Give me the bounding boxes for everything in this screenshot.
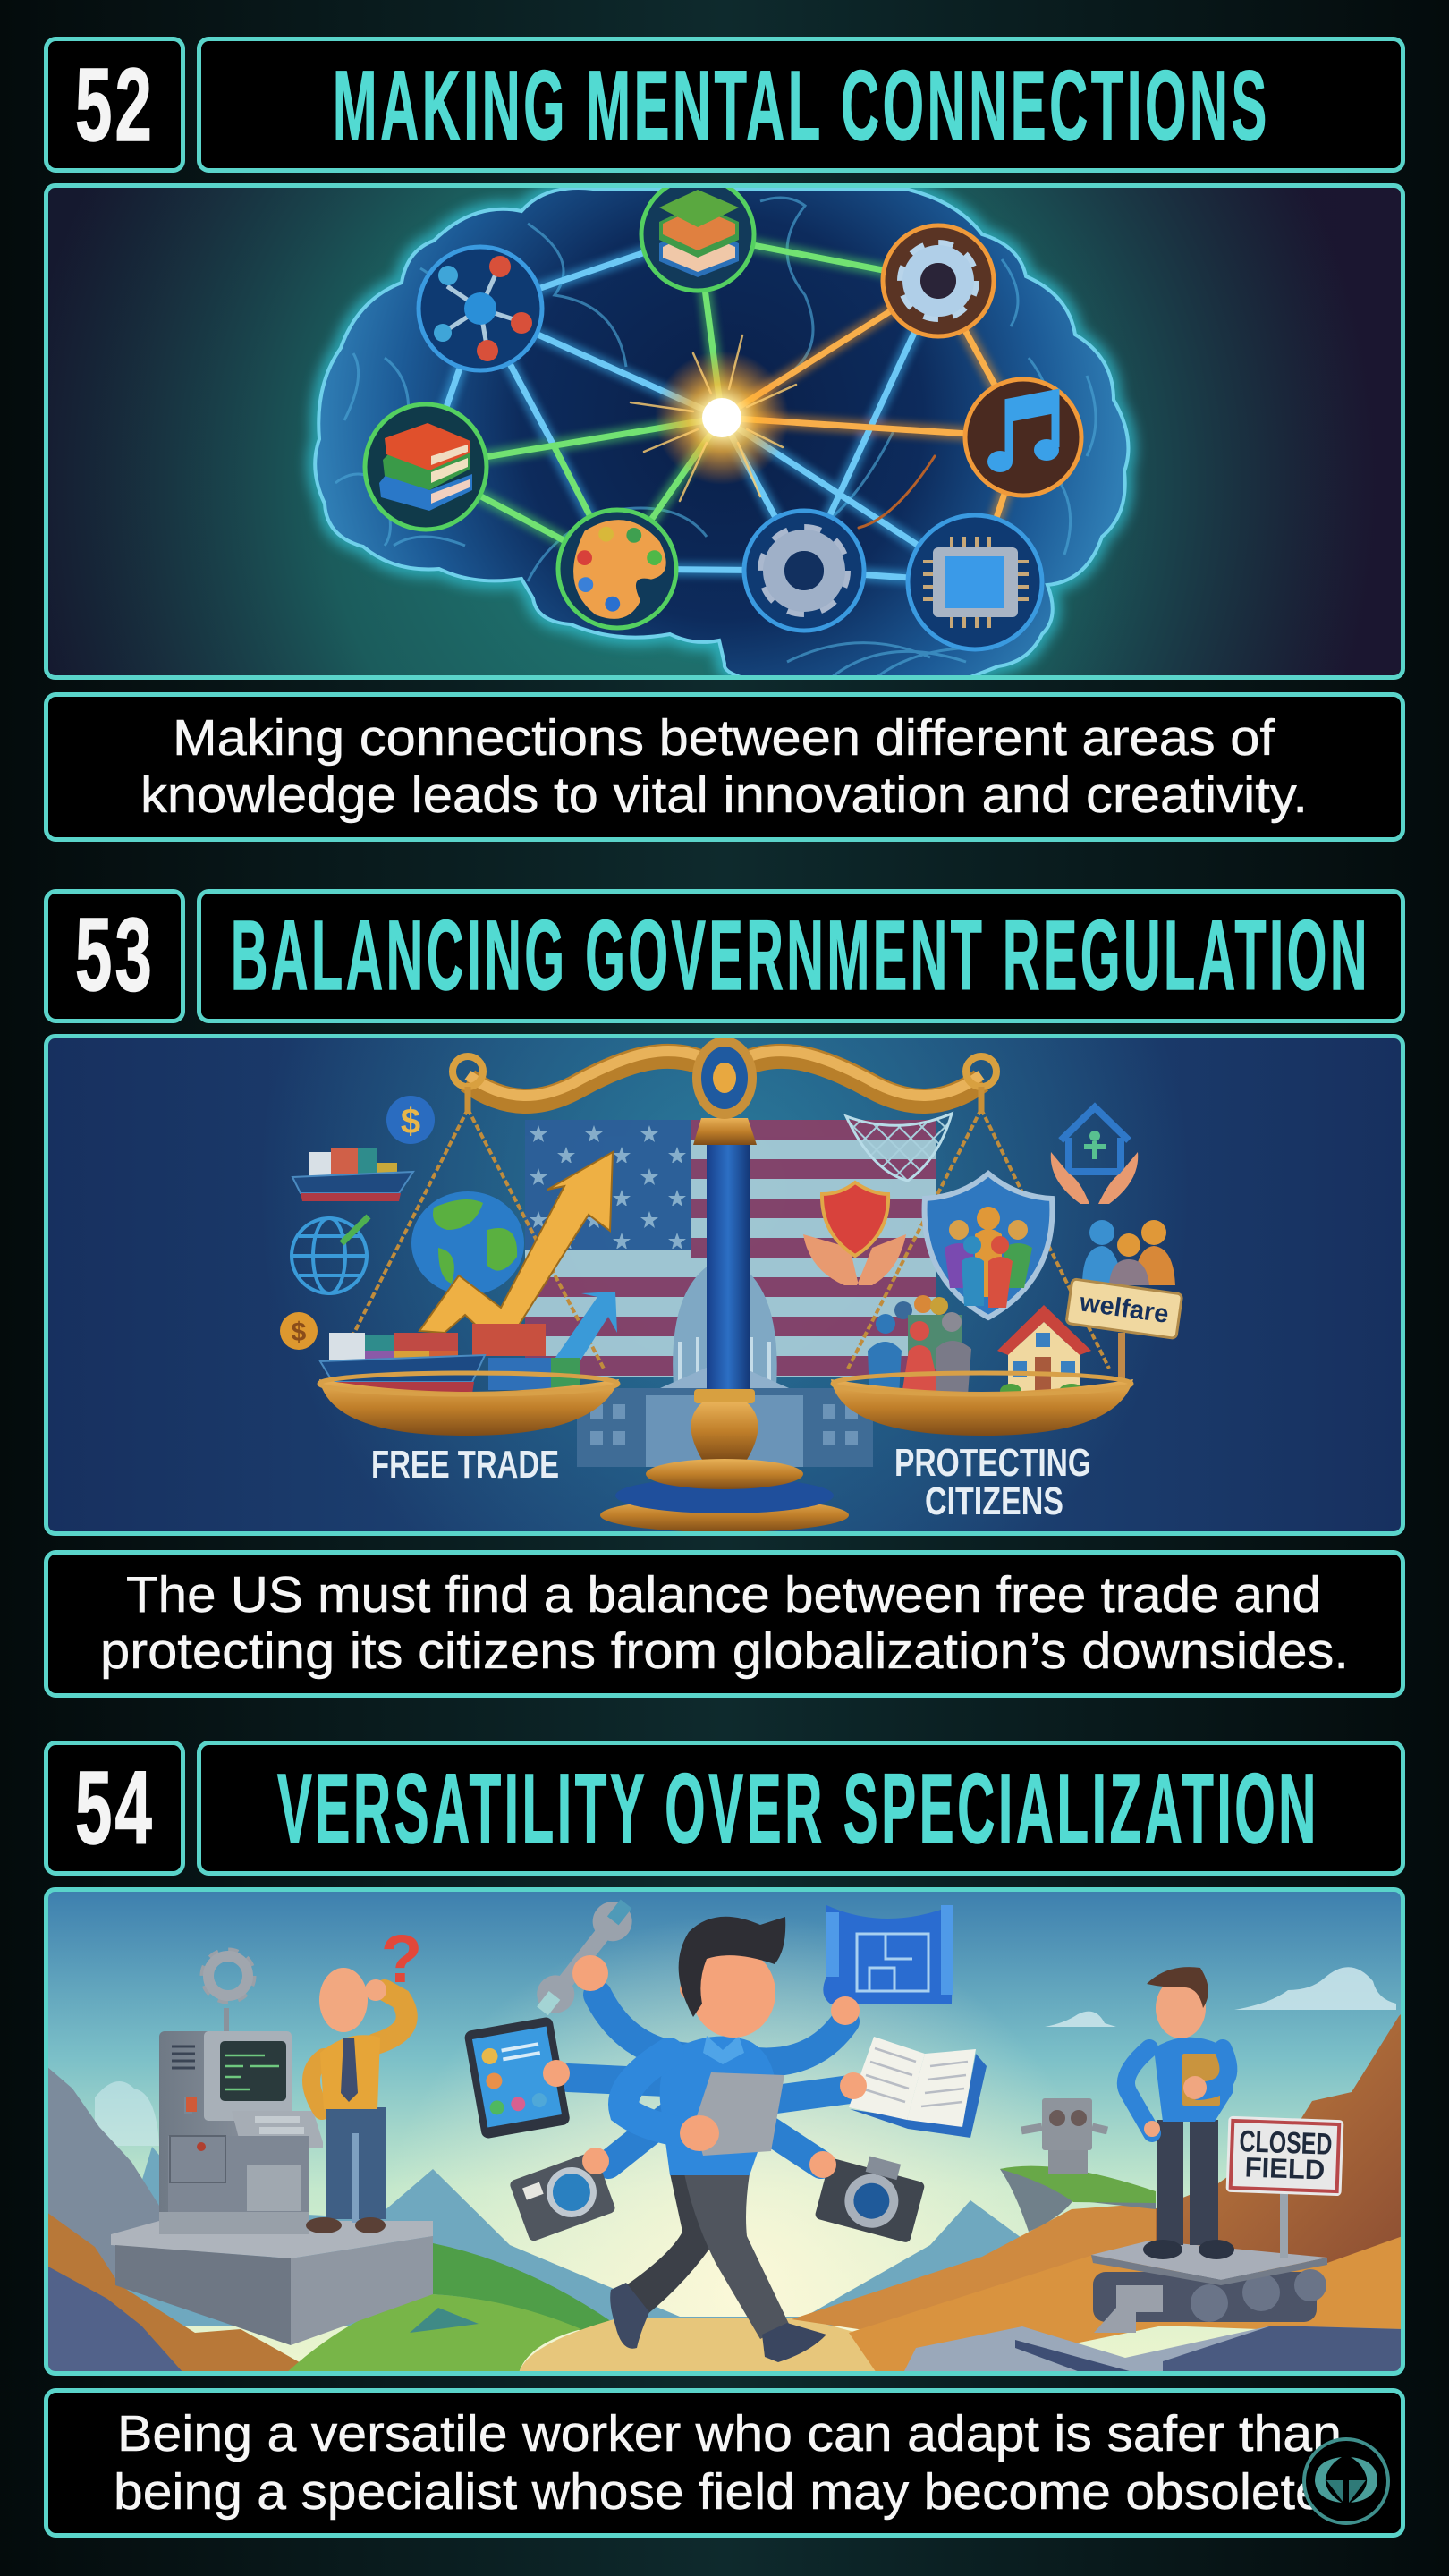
- brain silhouette: [315, 188, 1128, 677]
- node: green book stack: [641, 178, 754, 291]
- caption 53: The US must find a balance between free trade and: [126, 1566, 1321, 1623]
- safety net: [846, 1114, 952, 1181]
- american flag: [525, 1120, 936, 1377]
- gold rising arrow: [419, 1152, 613, 1351]
- closed field sign: CLOSED: [1239, 2124, 1333, 2162]
- label: protecting citizens: [894, 1441, 1091, 1523]
- node: music note: [965, 379, 1081, 496]
- spark at centre of brain: [631, 335, 796, 501]
- back leg: [626, 2174, 720, 2315]
- citizens group: [1082, 1220, 1175, 1285]
- head and hair: [679, 1917, 785, 2038]
- number badge 52: [47, 39, 182, 170]
- label: free trade: FREE TRADE: [371, 1443, 559, 1487]
- node: blue gear: [744, 511, 864, 631]
- large shield with citizens: [925, 1174, 1052, 1318]
- tablet in hand: [463, 2016, 571, 2140]
- caption 52: [47, 694, 1402, 839]
- left chains: [353, 1109, 604, 1368]
- orange hills: [792, 2203, 1402, 2373]
- node: orange gear: [883, 225, 994, 336]
- stone pedestal: [111, 2221, 433, 2345]
- man with folder: [1126, 1967, 1234, 2259]
- network links: [426, 234, 1023, 582]
- earth globe: [411, 1191, 524, 1295]
- right brown cliff: [1154, 2012, 1402, 2272]
- caption 52: knowledge leads to vital innovation and creativity.: [140, 767, 1308, 824]
- caption 53: protecting its citizens from globalization’s downsides.: [100, 1623, 1349, 1680]
- node: paint palette: [558, 510, 676, 628]
- blue dollar coin: $: [401, 1102, 420, 1141]
- back arms: [568, 1995, 850, 2165]
- number badge 52: 52: [75, 47, 155, 163]
- scale beam: [453, 1051, 996, 1114]
- section 54: versatility over specialization: [47, 1742, 1402, 2535]
- node: molecule: [419, 247, 542, 370]
- number badge 54: 54: [75, 1750, 155, 1866]
- welfare sign: [1066, 1279, 1182, 1386]
- front leg: [684, 2174, 789, 2339]
- open book: [849, 2037, 987, 2138]
- number badge 54: [47, 1742, 182, 1873]
- label: protecting citizens: PROTECTING: [894, 1441, 1091, 1485]
- section 53: balancing government regulation: [47, 891, 1402, 1696]
- blueprint: [823, 1905, 953, 2004]
- caption 54: Being a versatile worker who can adapt is safer than: [117, 2405, 1342, 2462]
- node: microchip: [908, 515, 1042, 649]
- grey rocks: [903, 2326, 1402, 2373]
- distant mountains: [47, 2066, 1055, 2326]
- wire globe: [292, 1216, 369, 1293]
- grey tablet: [694, 2072, 784, 2156]
- multi-armed worker: [463, 1892, 987, 2362]
- caption 53: [47, 1553, 1402, 1696]
- node: colourful book stack: [365, 404, 487, 530]
- orange dollar coin: [280, 1312, 318, 1350]
- closed field sign: [1226, 2116, 1343, 2258]
- scale base: [600, 1389, 849, 1532]
- left rocks: [47, 2212, 318, 2373]
- crowd on right pan: [868, 1295, 971, 1395]
- small cargo ship: [292, 1148, 413, 1201]
- house and hands icon: [1051, 1107, 1138, 1204]
- photo camera in lower right hand: [814, 2147, 928, 2243]
- cliff with robot: [1000, 2098, 1156, 2232]
- caption 52: Making connections between different areas of: [173, 709, 1275, 767]
- cargo ship and containers on left pan: [320, 1324, 580, 1394]
- left pan: [319, 1373, 619, 1436]
- number badge 53: 53: [75, 896, 155, 1013]
- welfare sign: welfare: [1077, 1288, 1171, 1329]
- camera in lower left hand: [509, 2150, 616, 2242]
- clouds: [95, 1967, 1396, 2146]
- house: [997, 1305, 1091, 1398]
- confused man in yellow shirt: [306, 1921, 422, 2233]
- old computer machine: [159, 1952, 323, 2234]
- label: protecting citizens: CITIZENS: [925, 1479, 1063, 1523]
- orange dollar coin: $: [292, 1318, 307, 1347]
- red shield and hands: [803, 1182, 906, 1285]
- right chains: [848, 1109, 1109, 1368]
- wrench: [527, 1892, 641, 2023]
- logo badge: [1304, 2439, 1388, 2523]
- right pan: [831, 1373, 1133, 1436]
- caption 54: [47, 2390, 1402, 2535]
- blue rising arrow: [553, 1292, 617, 1373]
- torso: [660, 2037, 776, 2175]
- section 52: making mental connections: [47, 39, 1402, 839]
- scale medallion: [692, 1037, 757, 1119]
- closed field sign: FIELD: [1244, 2151, 1326, 2186]
- panel: balance scale illustration: [47, 1037, 1402, 1533]
- capitol building: [577, 1257, 873, 1467]
- scale column: [693, 1118, 757, 1391]
- green hills: [286, 2243, 617, 2373]
- track platform: [1091, 2241, 1327, 2333]
- blue dollar coin: [386, 1096, 435, 1144]
- confused man in yellow shirt: ?: [381, 1921, 422, 1997]
- front arm: [623, 2053, 693, 2133]
- panel: glowing brain illustration: [47, 178, 1402, 677]
- caption 54: being a specialist whose field may become obsolete.: [114, 2463, 1339, 2521]
- panel: versatile worker landscape: [47, 1890, 1402, 2373]
- sand path: [519, 2318, 1011, 2373]
- number badge 53: [47, 891, 182, 1021]
